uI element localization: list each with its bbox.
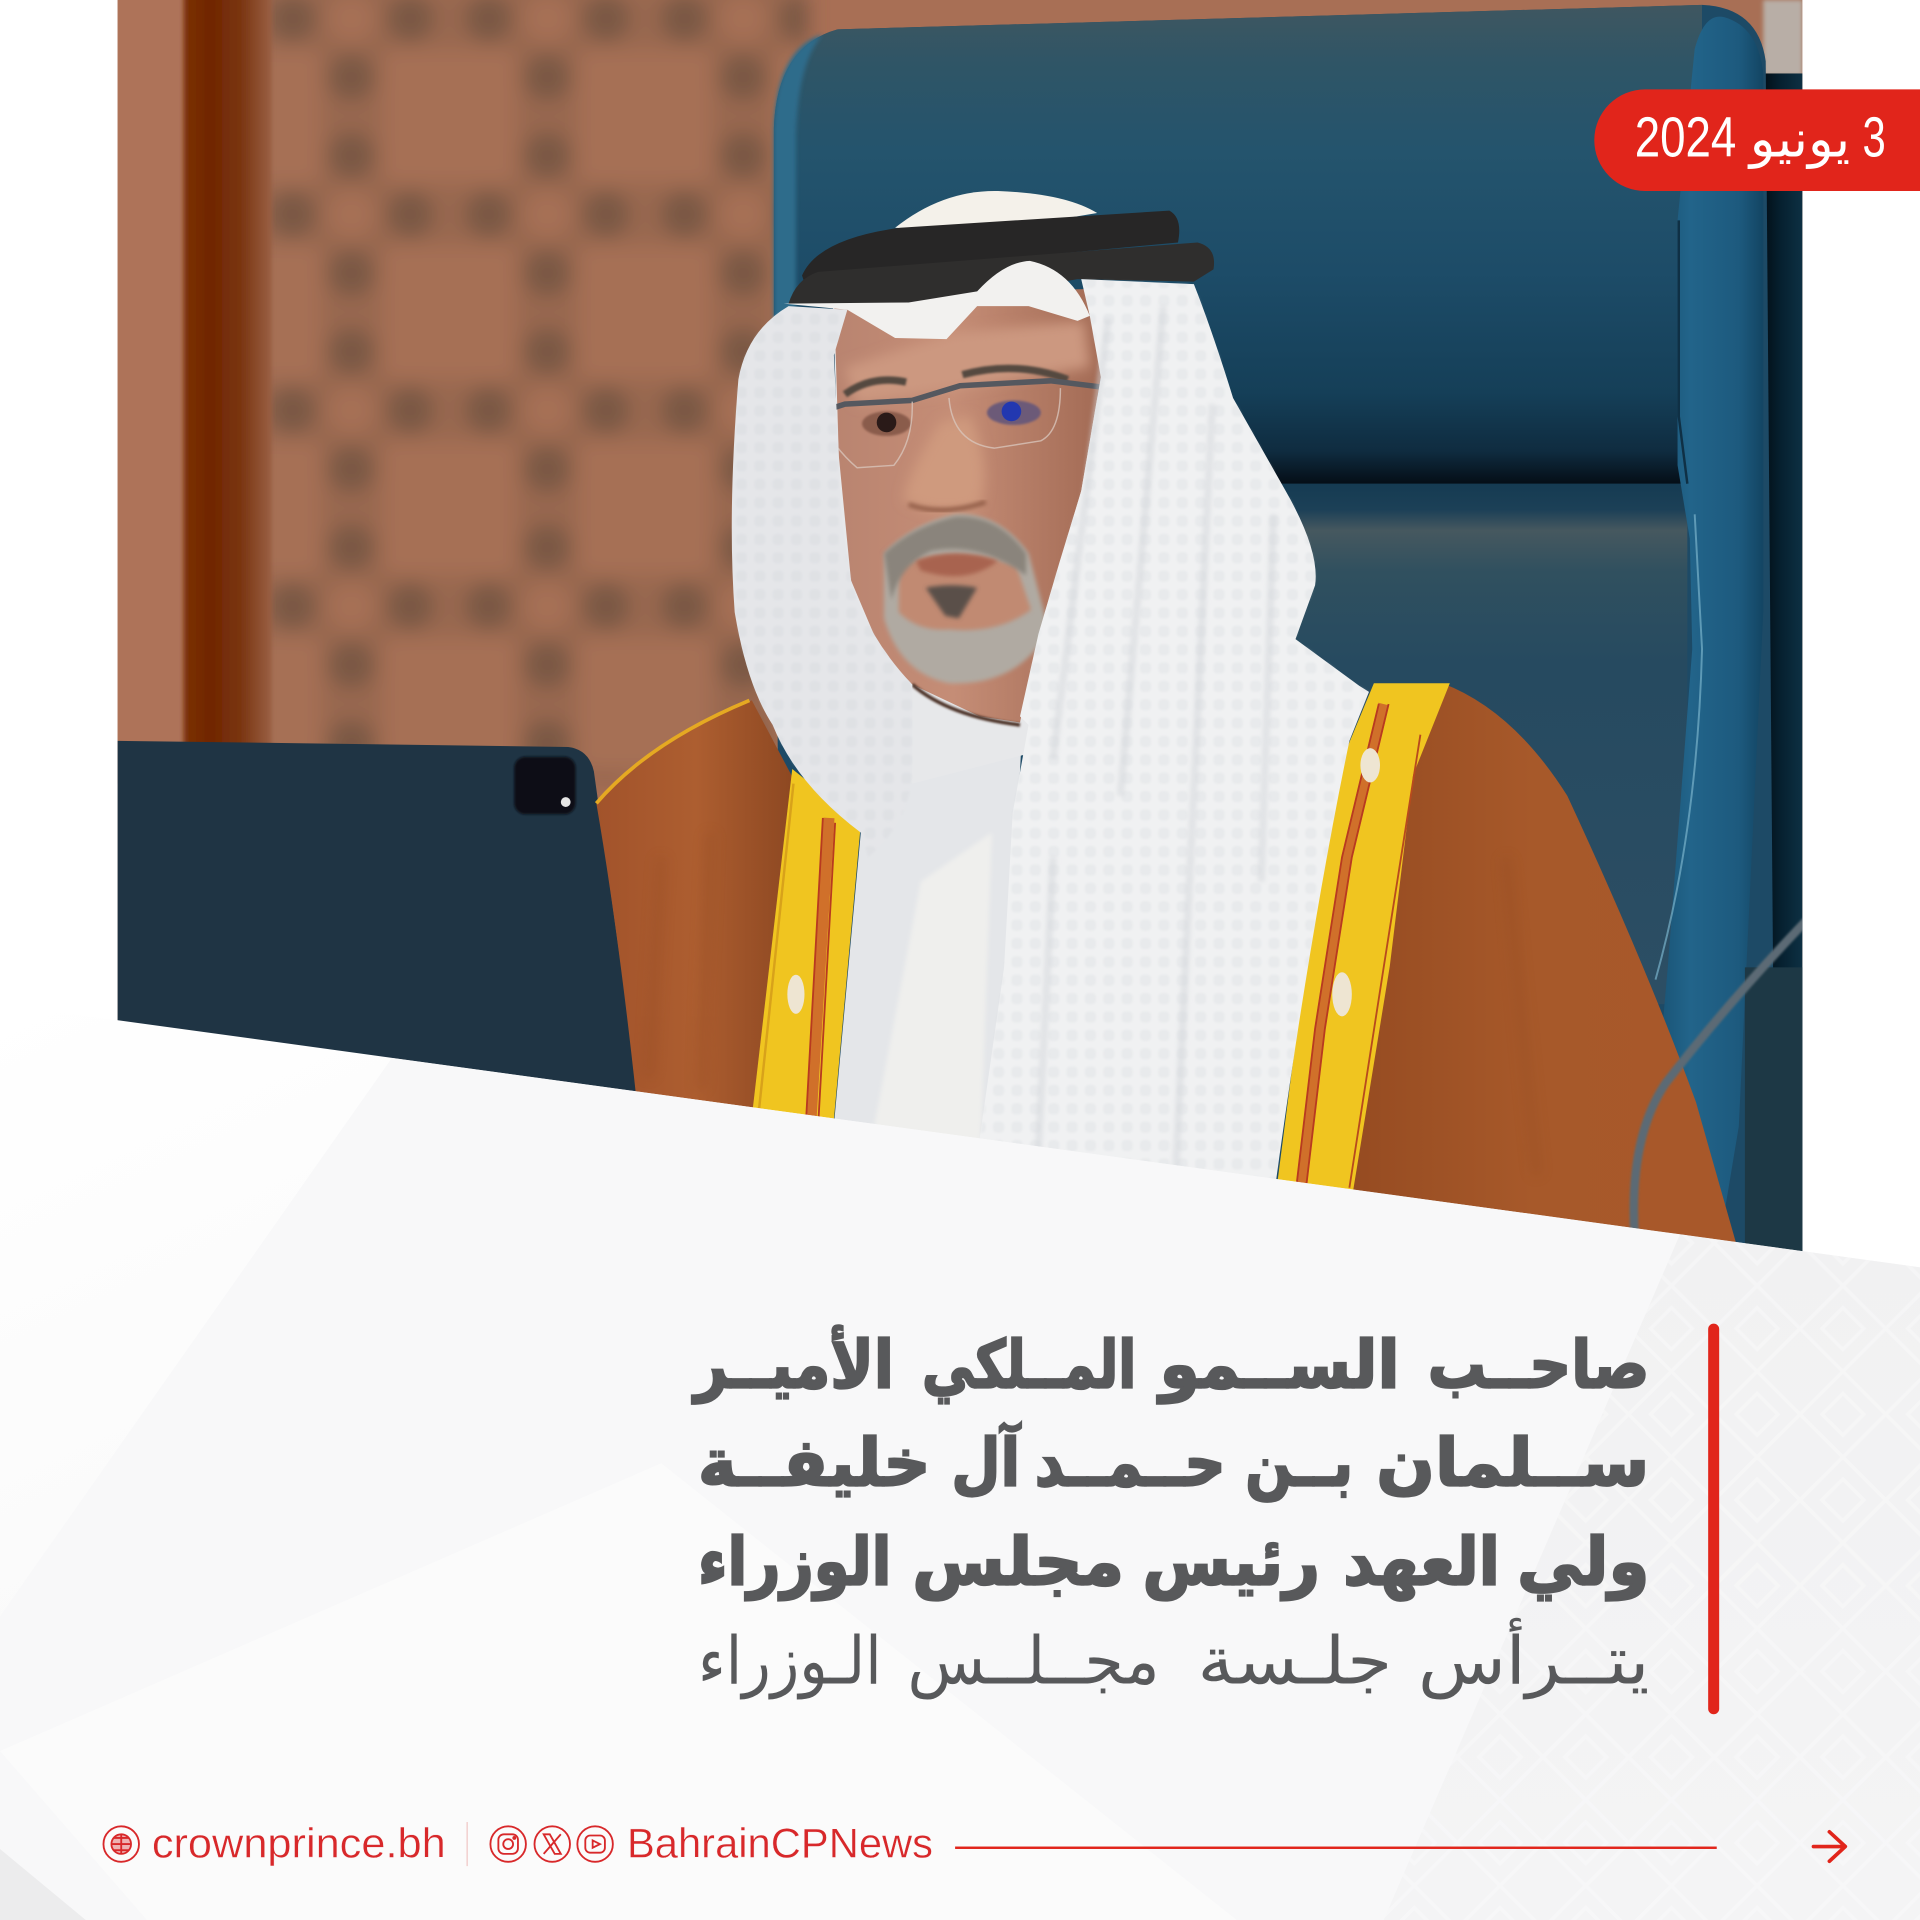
gold embroidered trim	[752, 683, 1450, 1206]
date badge: 2024	[1635, 106, 1736, 169]
headline line 1: صاحــب	[1428, 1326, 1649, 1403]
icon: x	[534, 1826, 570, 1862]
white thobe	[834, 756, 1021, 1138]
headline line 3: مجلس	[912, 1523, 1124, 1600]
subheading line 4: الـوزراء	[698, 1623, 882, 1700]
headline line 2: خليفــة	[698, 1424, 931, 1501]
lower white panel with diagonal edge	[0, 1004, 1920, 1920]
website address: crownprince.bh	[152, 1820, 446, 1867]
ghutra underlay behind the face	[833, 308, 1098, 756]
white ghutra headdress	[732, 191, 1369, 1182]
headline line 3	[698, 1523, 1649, 1601]
headline line 2: حــمــد	[1035, 1424, 1226, 1501]
eyes	[862, 411, 911, 436]
subheading line 4: يتــرأس	[1418, 1618, 1649, 1700]
patterned wall	[118, 0, 1802, 784]
icon: globe	[103, 1826, 139, 1862]
date badge: يونيو	[1747, 110, 1850, 170]
headline line 2	[698, 1421, 1649, 1502]
headline line 1: المــلكي	[922, 1326, 1136, 1403]
beard	[884, 514, 1046, 683]
headline text block	[692, 1324, 1649, 1700]
photo: Crown Prince seated in a blue leather chair	[118, 0, 1806, 1286]
headline line 2: ســلمان	[1376, 1424, 1649, 1501]
icon: instagram	[490, 1826, 526, 1862]
headline line 3: ولي	[1517, 1523, 1649, 1601]
footer contact row	[103, 1820, 933, 1867]
tablet on the desk	[118, 741, 639, 1096]
glasses	[836, 378, 1100, 410]
headline line 1: الأميــر	[692, 1324, 894, 1404]
date badge: 3	[1862, 106, 1886, 169]
eyebrows	[845, 368, 1068, 394]
red accent bar	[1708, 1324, 1719, 1714]
headline line 1: الســمو	[1157, 1326, 1400, 1404]
headline line 3: العهد	[1343, 1523, 1500, 1601]
social handle: BahrainCPNews	[627, 1820, 933, 1867]
headline line 3: رئيس	[1142, 1523, 1320, 1600]
headline line 2: آل	[951, 1421, 1021, 1501]
face	[811, 289, 1101, 725]
subheading line 4: جلـسة	[1198, 1623, 1392, 1700]
date badge	[1594, 89, 1920, 191]
brown bisht robe	[596, 683, 1741, 1261]
headline line 2: بــن	[1245, 1424, 1353, 1502]
headline line 1	[692, 1324, 1649, 1404]
icon: youtube	[577, 1826, 613, 1862]
arrow	[1813, 1832, 1845, 1861]
microphone stem	[1634, 921, 1806, 1237]
subheading line 4	[698, 1618, 1649, 1700]
headline line 3: الوزراء	[698, 1523, 891, 1601]
footer rule	[955, 1847, 1717, 1849]
blue leather chair	[774, 5, 1802, 1286]
subheading line 4: مجــلــس	[907, 1623, 1160, 1700]
